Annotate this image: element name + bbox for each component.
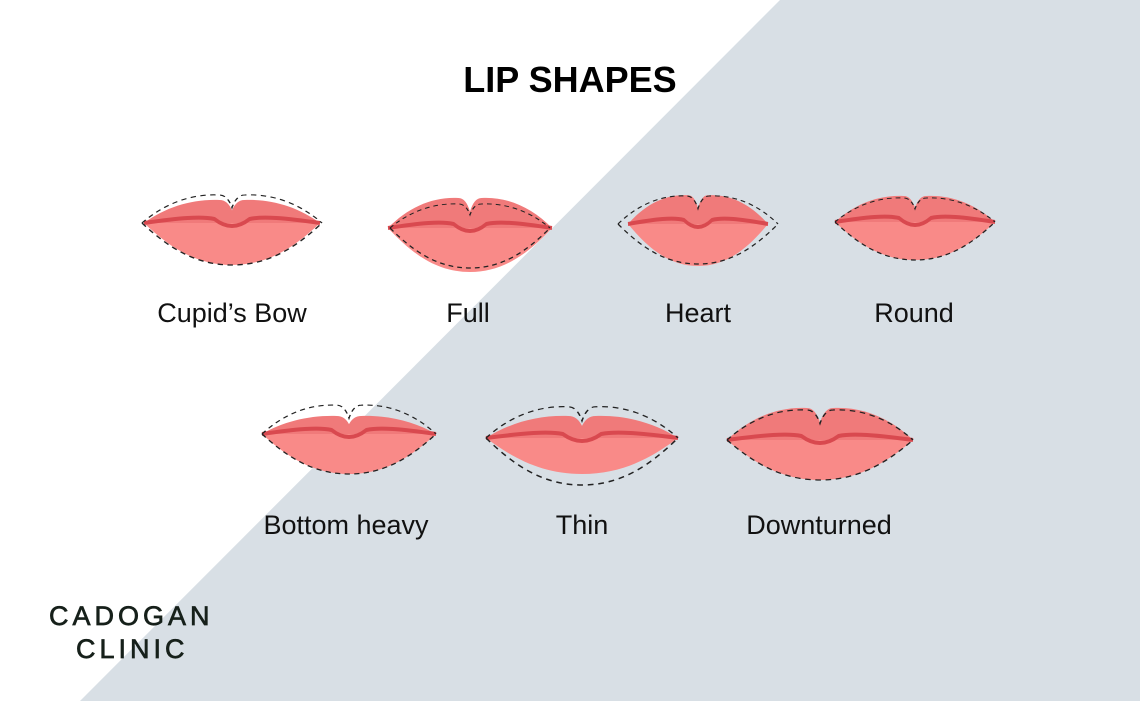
title: LIP SHAPES xyxy=(463,59,677,100)
lip: Round xyxy=(835,196,995,260)
lip: Thin xyxy=(486,407,678,485)
labels: Bottom heavy xyxy=(263,510,429,540)
labels: Downturned xyxy=(746,510,892,540)
lip: Downturned xyxy=(727,408,913,480)
lip: Cupid's Bow xyxy=(142,195,322,265)
lip: Bottom heavy xyxy=(262,405,436,474)
labels xyxy=(157,298,954,540)
logo: CLINIC xyxy=(76,634,189,664)
logo: CADOGAN xyxy=(49,601,214,631)
labels: Cupid’s Bow xyxy=(157,298,307,328)
labels: Full xyxy=(446,298,490,328)
labels: Heart xyxy=(665,298,732,328)
lip: Heart xyxy=(618,195,778,266)
labels: Thin xyxy=(556,510,608,540)
logo xyxy=(49,601,214,664)
lip: Full xyxy=(388,198,552,272)
labels: Round xyxy=(874,298,954,328)
